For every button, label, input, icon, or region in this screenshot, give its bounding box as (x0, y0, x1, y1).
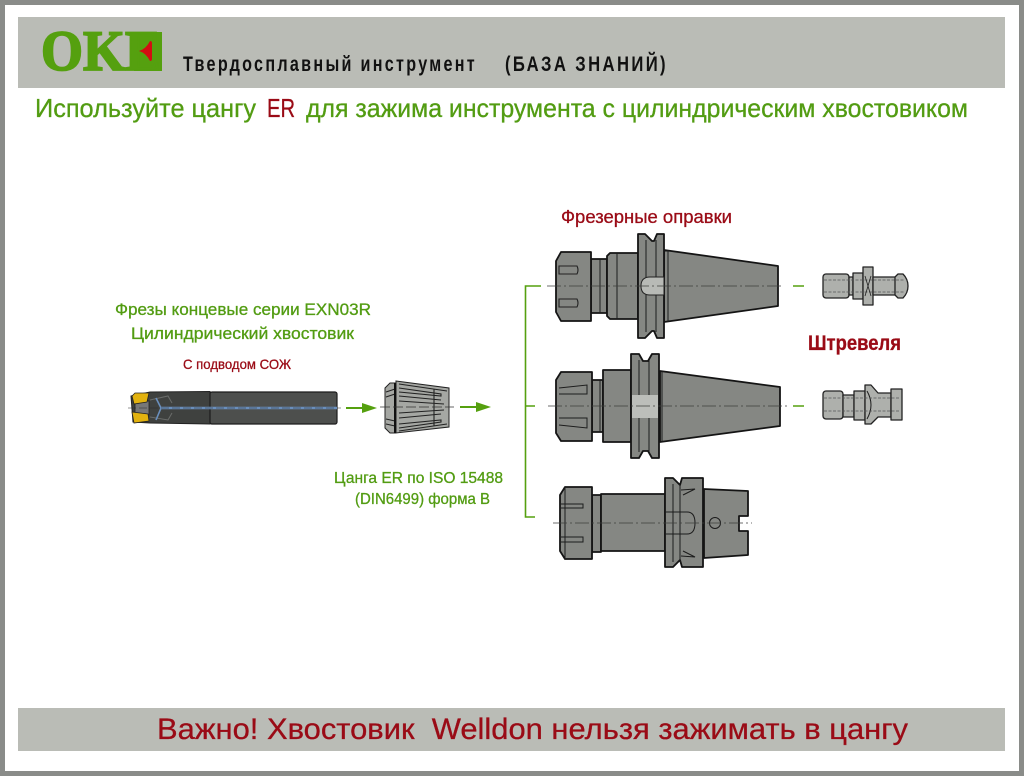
end mill drawing (128, 392, 341, 424)
logo: OKE: OKE (41, 20, 161, 83)
title: для зажима инструмента с цилиндрическим хвостовиком (306, 93, 968, 123)
header bar (18, 17, 1005, 88)
pull stud 1 (823, 267, 908, 305)
holder 2 (548, 354, 788, 458)
holder 3 (553, 478, 752, 567)
bottom bar (18, 708, 1005, 751)
label: coolant: С подводом СОЖ (183, 356, 291, 372)
label: collet (334, 470, 503, 508)
label: end mills (115, 300, 371, 343)
bracket (525, 286, 541, 517)
collet drawing (380, 381, 454, 433)
holder 1 (547, 234, 784, 338)
label: end mills: Фрезы концевые серии EXN03R (115, 300, 371, 319)
label: collet: (DIN6499) форма B (355, 491, 490, 508)
connector dashes (793, 286, 804, 406)
label: milling holders: Фрезерные оправки (561, 207, 732, 227)
label: end mills: Цилиндрический хвостовик (131, 324, 355, 343)
arrow: mill to collet (346, 403, 377, 413)
label: collet: Цанга ER по ISO 15488 (334, 470, 503, 487)
title (35, 93, 968, 123)
arrow: collet to holders (460, 402, 491, 412)
header text: Твердосплавный инструмент (183, 53, 477, 76)
warning text: Важно! Хвостовик Welldon нельзя зажимать в цангу (157, 713, 908, 746)
pull stud 2 (823, 385, 902, 424)
title: Используйте цангу (35, 93, 256, 123)
label: pull studs: Штревеля (808, 332, 901, 355)
header tag: (БАЗА ЗНАНИЙ) (505, 52, 668, 76)
title: ER (267, 93, 295, 123)
